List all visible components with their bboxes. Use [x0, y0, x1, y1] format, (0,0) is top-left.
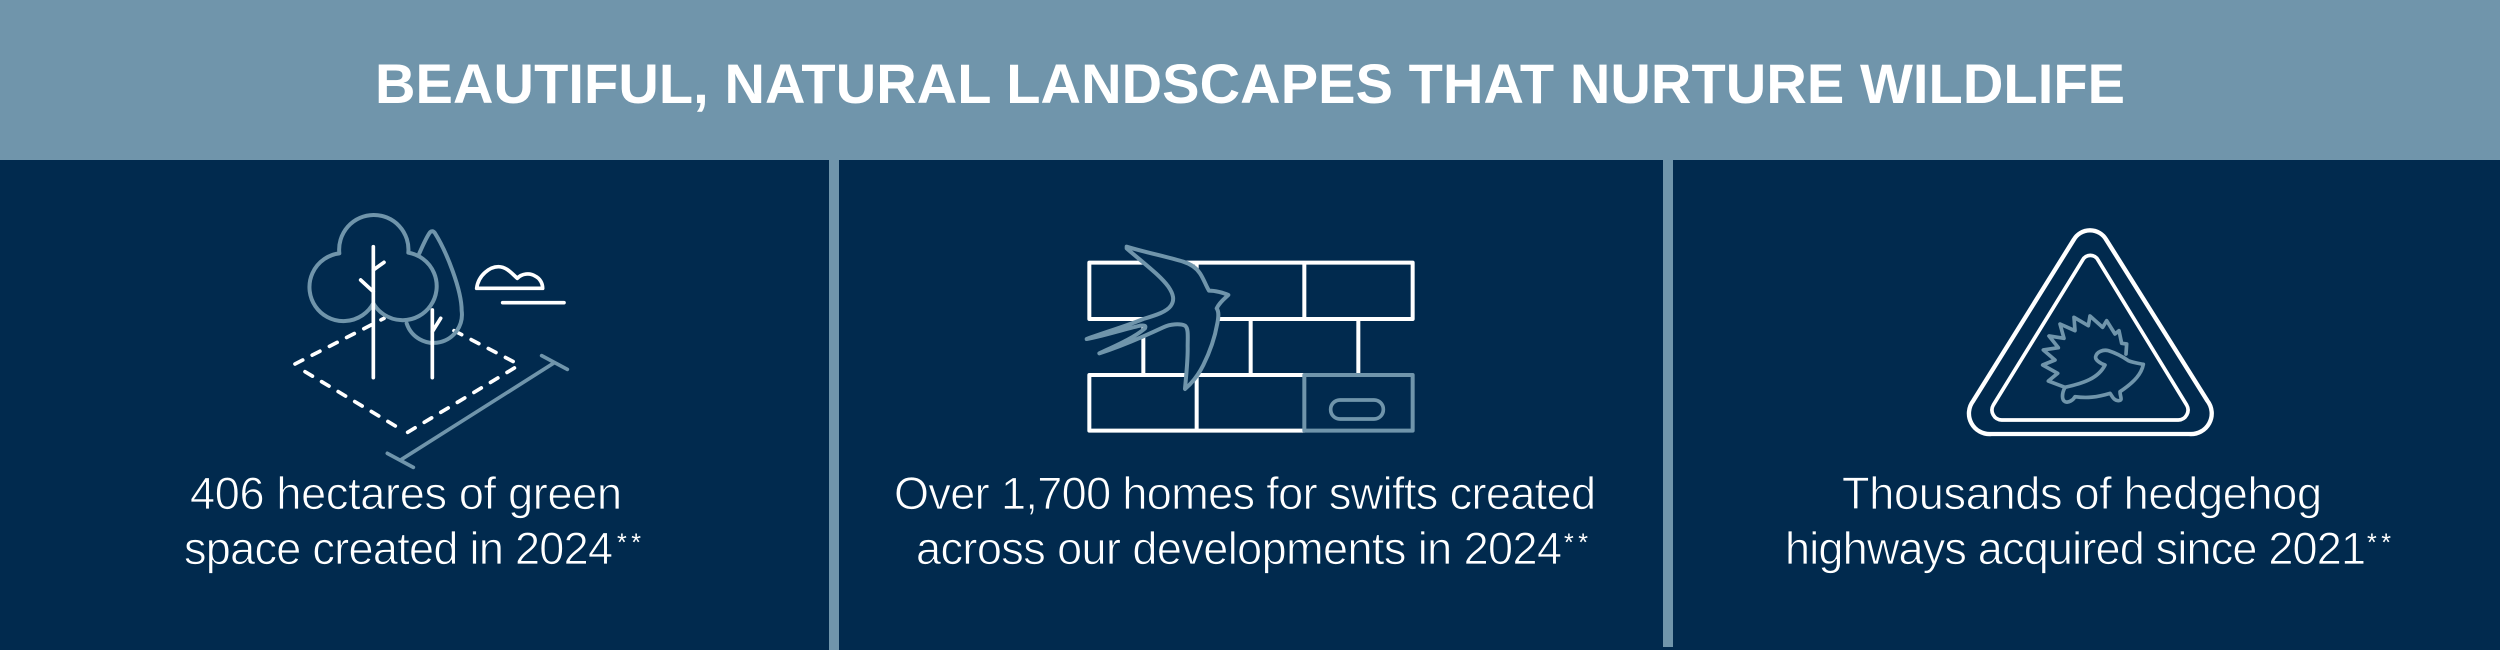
text: green space: 406 hectares of green [190, 468, 622, 519]
text: swift homes: across our developments in 2024 [916, 523, 1562, 574]
text: hedgehog highways: ** [2367, 529, 2391, 557]
text: green space: ** [617, 529, 641, 557]
panel: swift homes [839, 160, 1663, 650]
icon: hedgehog warning sign [1969, 230, 2212, 434]
icon: trees on a measured plot of land [295, 215, 567, 467]
panel: green space [0, 160, 829, 650]
title: BEAUTIFUL, NATURAL LANDSCAPES THAT NURTURE WILDLIFE [375, 52, 2125, 115]
header banner [0, 0, 2500, 160]
text: green space: space created in 2024 [184, 523, 613, 574]
text: green space [184, 468, 641, 574]
text: hedgehog highways: Thousands of hedgehog [1842, 468, 2322, 519]
text: swift homes [894, 468, 1596, 574]
text: swift homes: Over 1,700 homes for swifts created [894, 468, 1596, 519]
text: hedgehog highways [1785, 468, 2391, 574]
divider [829, 160, 839, 650]
text: hedgehog highways: highways acquired since 2021 [1785, 523, 2366, 574]
icon: swift in front of a brick wall [1087, 247, 1413, 431]
divider [1663, 160, 1673, 647]
panel: hedgehog highways [1673, 160, 2500, 650]
text: swift homes: ** [1564, 529, 1588, 557]
